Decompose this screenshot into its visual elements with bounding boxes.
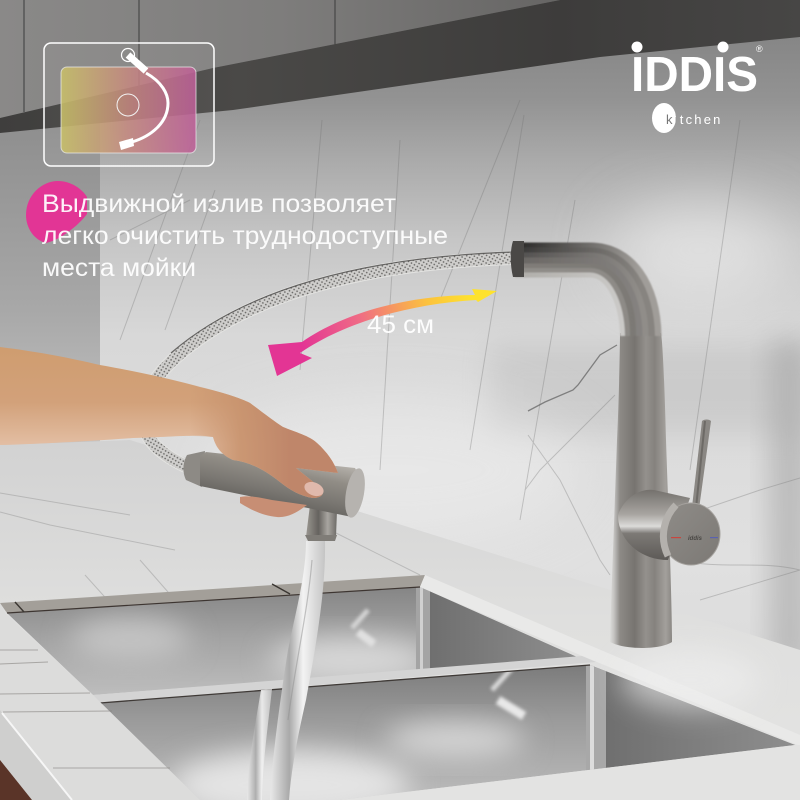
spout collar bbox=[511, 241, 524, 277]
arrow: 45 cm pull-out range bbox=[268, 289, 497, 376]
right counter edge bbox=[420, 575, 800, 746]
handle disc bbox=[662, 503, 720, 565]
faucet bbox=[511, 241, 720, 648]
lower fingers bbox=[240, 496, 307, 517]
logo: iddis kitchen bbox=[631, 42, 763, 133]
cabinet underside bbox=[0, 0, 800, 133]
logo: iddis kitchen: ® bbox=[756, 44, 763, 54]
handle cylinder bbox=[618, 490, 690, 560]
heading text: места мойки bbox=[42, 254, 196, 282]
countertop bbox=[0, 440, 800, 800]
sink rim back edge bbox=[0, 575, 425, 613]
left counter bbox=[0, 603, 200, 800]
outlet bbox=[306, 505, 337, 537]
upper cabinets bbox=[0, 0, 560, 118]
faucet body bbox=[610, 333, 672, 648]
disc markings: iddis bbox=[688, 536, 703, 542]
sink front bowl bbox=[100, 663, 800, 800]
faucet counter base reflection bbox=[620, 650, 760, 710]
wood cabinet front bbox=[0, 760, 32, 800]
front counter bbox=[340, 745, 800, 800]
fingernail bbox=[302, 479, 326, 499]
sink back bowl bbox=[7, 585, 580, 695]
disc markings bbox=[671, 536, 718, 542]
icon: pull-out spout in sink bbox=[44, 43, 214, 166]
hose bbox=[142, 252, 512, 468]
heading text: Выдвижной излив позволяет bbox=[42, 190, 397, 218]
pink blob bbox=[26, 181, 87, 243]
faucet spout bend bbox=[515, 246, 658, 336]
length label: 45 см bbox=[367, 311, 434, 339]
sink divider bbox=[93, 656, 596, 703]
hand shading bbox=[190, 384, 338, 498]
heading text: легко очистить труднодоступные bbox=[42, 222, 448, 250]
logo: iddis kitchen: IDDIS bbox=[631, 48, 758, 102]
hand and arm bbox=[0, 347, 338, 517]
head end cap bbox=[342, 467, 368, 519]
lever bbox=[692, 420, 711, 509]
logo: iddis kitchen: kitchen bbox=[666, 112, 723, 127]
collar bbox=[183, 451, 205, 487]
water stream bbox=[247, 541, 325, 800]
spray head bbox=[183, 451, 368, 541]
heading text bbox=[42, 190, 448, 282]
arm bbox=[0, 347, 338, 498]
head cylinder bbox=[200, 452, 361, 517]
